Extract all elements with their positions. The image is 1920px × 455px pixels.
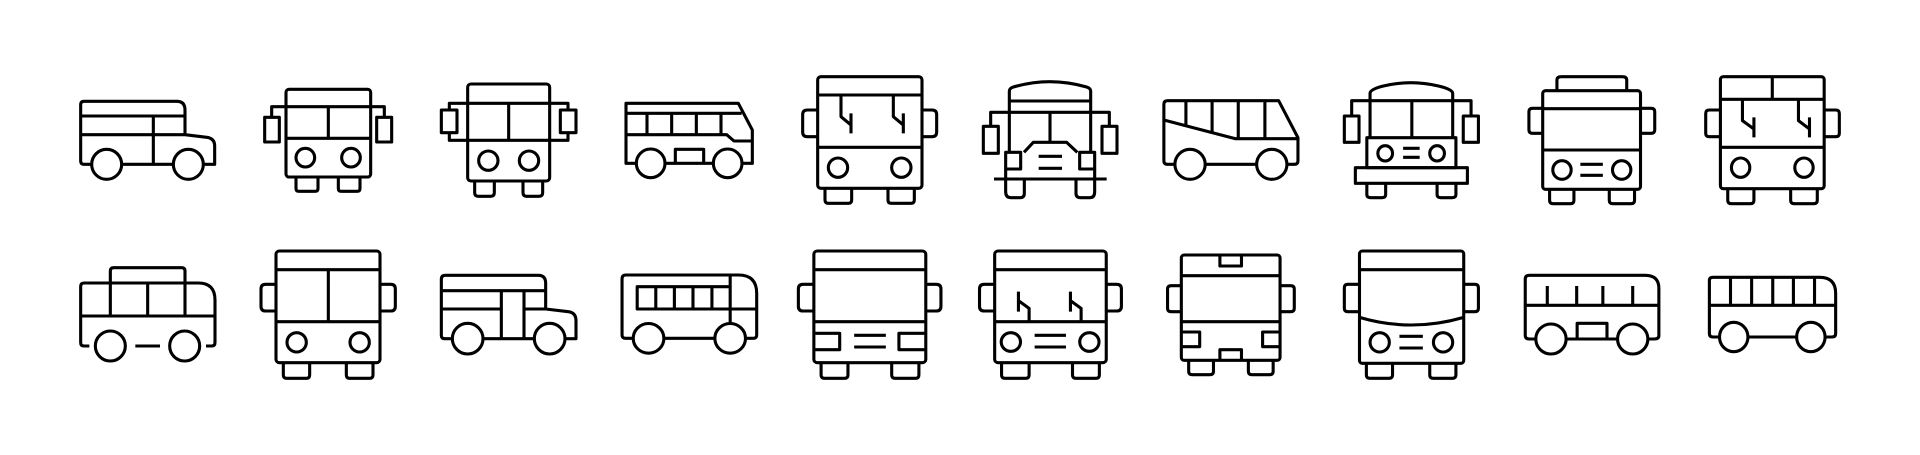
icon: bus front with raised wipers xyxy=(980,251,1121,378)
icon: bus front with notches xyxy=(1168,255,1294,375)
icon: school bus side view xyxy=(81,101,215,179)
icon: bus front with square lamps xyxy=(798,251,941,378)
icon: bus front with split windshield xyxy=(261,251,395,378)
icon: bus front with wipers xyxy=(803,77,937,203)
icon: bus front with boxed mirrors xyxy=(441,84,576,196)
icon: coach side view with slanted window xyxy=(1164,101,1298,179)
icon: bus side view with full window row xyxy=(1709,277,1836,352)
icon: coach side view with windows xyxy=(626,103,752,178)
icon: bus front with roof box xyxy=(1529,77,1655,204)
icon: bus side view with roof box xyxy=(81,268,215,361)
icon: bus front with curved windshield xyxy=(1344,251,1478,378)
icon: bus front with divided sign and wipers xyxy=(1706,77,1839,204)
row 1: bus icons xyxy=(81,77,1839,204)
icon: bus side view with roof ticks xyxy=(1525,275,1659,354)
icon: bus front with hanging mirrors xyxy=(265,89,392,191)
icon: school bus front with bumper xyxy=(1344,83,1478,198)
row 2: bus icons xyxy=(81,251,1836,378)
icon: school bus side view with door xyxy=(441,275,576,354)
icon: school bus front with hood xyxy=(983,82,1117,198)
icon: bus side view with window strip xyxy=(622,275,757,353)
